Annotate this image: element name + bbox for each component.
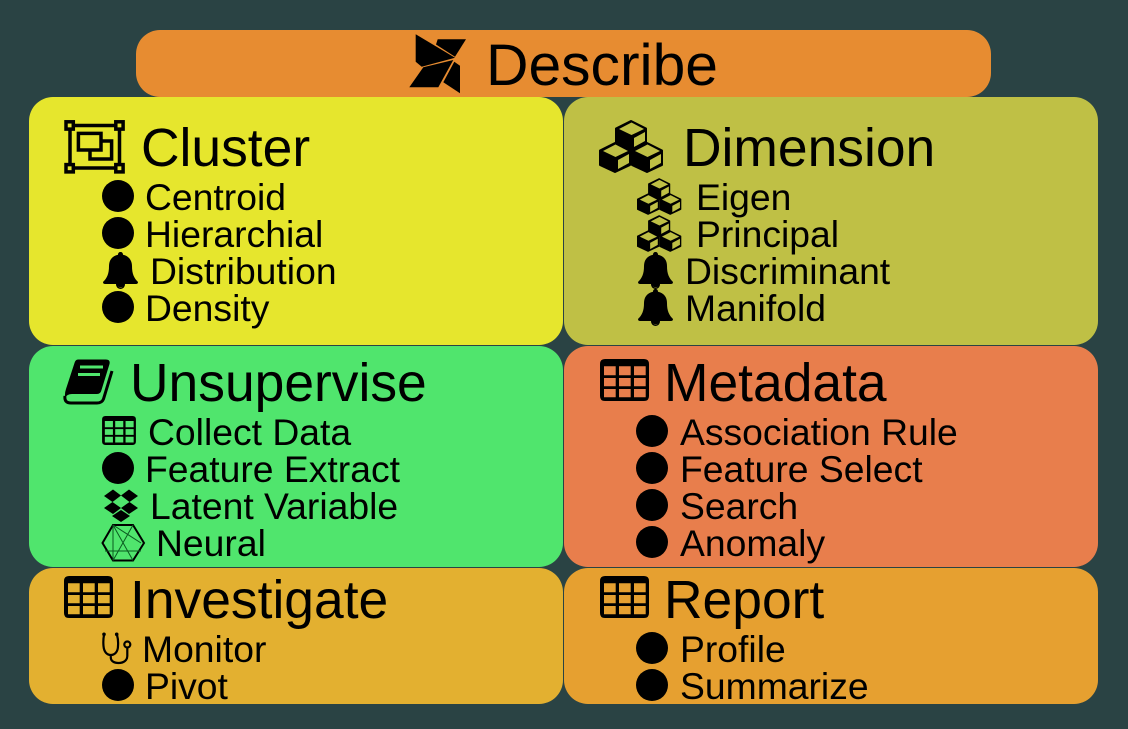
item: monitor: Monitor	[142, 628, 266, 670]
item: association rule: Association Rule	[680, 411, 958, 453]
heading: unsupervise: Unsupervise	[130, 354, 427, 413]
item: centroid: Centroid	[145, 176, 286, 218]
icon: table	[600, 359, 649, 401]
panel: metadata	[564, 346, 1098, 567]
heading: cluster: Cluster	[141, 119, 310, 178]
item: neural	[102, 522, 266, 564]
heading: investigate: Investigate	[130, 571, 388, 630]
item: eigen: Eigen	[696, 176, 791, 218]
icon: table	[64, 576, 113, 618]
heading: metadata: Metadata	[664, 354, 887, 413]
item: discriminant: Discriminant	[685, 250, 891, 292]
item: principal: Principal	[696, 213, 839, 255]
panel: unsupervise	[29, 346, 563, 567]
heading: describe: Describe	[486, 33, 718, 98]
item: profile: Profile	[680, 628, 786, 670]
heading: report: Report	[664, 571, 824, 630]
panel: describe banner	[136, 30, 991, 98]
icon: table	[600, 576, 649, 618]
item: eigen	[638, 176, 791, 218]
item: pivot: Pivot	[145, 665, 229, 707]
item: search: Search	[680, 485, 798, 527]
panel: report	[564, 568, 1098, 707]
item: neural: Neural	[156, 522, 266, 564]
item: latent variable: Latent Variable	[150, 485, 398, 527]
item: manifold: Manifold	[685, 287, 826, 329]
icon: cluster selection	[66, 122, 123, 172]
item: collect data: Collect Data	[148, 411, 351, 453]
item: distribution: Distribution	[150, 250, 337, 292]
item: feature select: Feature Select	[680, 448, 923, 490]
item: hierarchial: Hierarchial	[145, 213, 323, 255]
icon: cubes	[600, 121, 662, 172]
item: feature extract: Feature Extract	[145, 448, 401, 490]
panel: cluster	[29, 97, 563, 345]
icon: pinwheel	[409, 34, 466, 93]
item: summarize: Summarize	[680, 665, 869, 707]
item: anomaly: Anomaly	[680, 522, 825, 564]
item: density: Density	[145, 287, 270, 329]
heading: dimension: Dimension	[683, 119, 935, 178]
icon: book	[65, 360, 112, 403]
panel: dimension	[564, 97, 1098, 345]
panel: investigate	[29, 568, 563, 707]
item: pivot	[102, 665, 229, 707]
